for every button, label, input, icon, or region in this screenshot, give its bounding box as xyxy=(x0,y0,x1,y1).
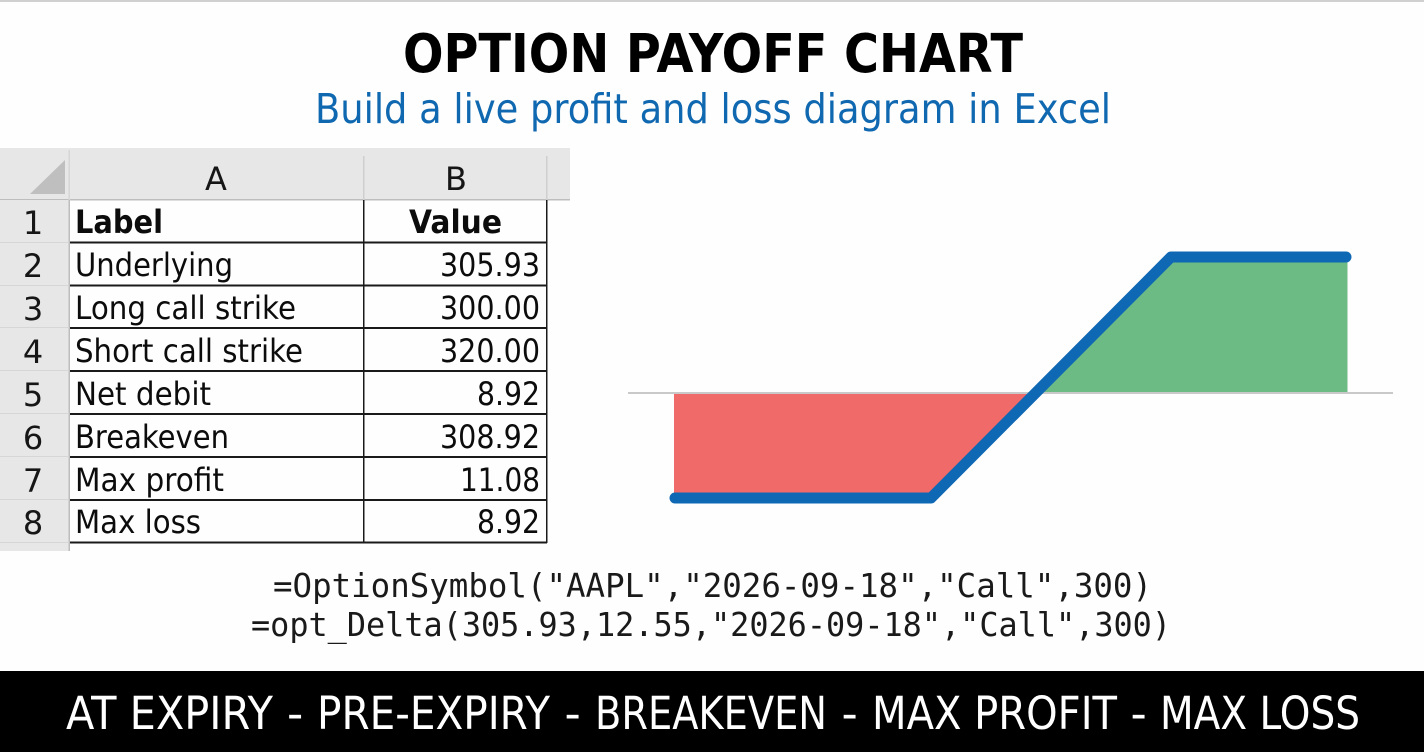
values column: 308.92 xyxy=(440,418,540,456)
formulas: =opt_Delta(305.93,12.55,"2026-09-18","Call",300) xyxy=(251,606,1171,644)
footer banner: MAX PROFIT xyxy=(872,687,1117,740)
footer banner: PRE-EXPIRY xyxy=(317,687,550,740)
formulas: =OptionSymbol("AAPL","2026-09-18","Call",300) xyxy=(273,567,1152,605)
labels column: Short call strike xyxy=(75,332,303,370)
row header column: 8 xyxy=(23,504,43,542)
labels column xyxy=(75,203,303,541)
footer banner: MAX LOSS xyxy=(1160,687,1360,740)
values column: 320.00 xyxy=(440,332,540,370)
zero axis xyxy=(628,392,1393,394)
row header column: 5 xyxy=(23,376,43,414)
row header column: 1 xyxy=(23,204,43,242)
values column: 8.92 xyxy=(477,375,540,413)
footer banner: - xyxy=(1130,687,1147,740)
column header band: A xyxy=(205,160,227,198)
labels column: Label xyxy=(75,203,163,241)
footer banner: BREAKEVEN xyxy=(595,687,827,740)
row header column: 2 xyxy=(23,247,43,285)
labels column: Underlying xyxy=(75,246,233,284)
column header band: B xyxy=(445,160,467,198)
row header column: 3 xyxy=(23,290,43,328)
labels column: Breakeven xyxy=(75,418,229,456)
labels column: Net debit xyxy=(75,375,211,413)
table grid xyxy=(70,200,548,544)
footer banner: - xyxy=(287,687,303,740)
payoff chart xyxy=(628,257,1393,498)
values column: 305.93 xyxy=(440,246,540,284)
payoff line xyxy=(675,257,1346,498)
title: OPTION PAYOFF CHART xyxy=(403,22,1023,85)
footer banner: AT EXPIRY xyxy=(66,687,273,740)
spreadsheet table xyxy=(0,148,570,551)
row header column xyxy=(0,200,70,551)
values column: Value xyxy=(409,203,502,241)
labels column: Max loss xyxy=(75,503,201,541)
row header column: 6 xyxy=(23,419,43,457)
values column: 8.92 xyxy=(477,503,540,541)
row header column: 4 xyxy=(23,333,43,371)
labels column: Max profit xyxy=(75,461,224,499)
row header column: 7 xyxy=(23,462,43,500)
footer banner xyxy=(0,671,1424,752)
loss area xyxy=(674,394,1028,494)
icon: select-all triangle xyxy=(30,160,65,194)
column header band xyxy=(0,148,570,200)
footer banner: - xyxy=(842,687,858,740)
values column: 300.00 xyxy=(440,289,540,327)
values column: 11.08 xyxy=(460,461,540,499)
profit area xyxy=(1040,258,1348,393)
values column xyxy=(409,203,540,541)
labels column: Long call strike xyxy=(75,289,296,327)
footer banner: - xyxy=(564,687,581,740)
formulas xyxy=(251,567,1171,644)
subtitle: Build a live profit and loss diagram in Excel xyxy=(315,85,1111,133)
